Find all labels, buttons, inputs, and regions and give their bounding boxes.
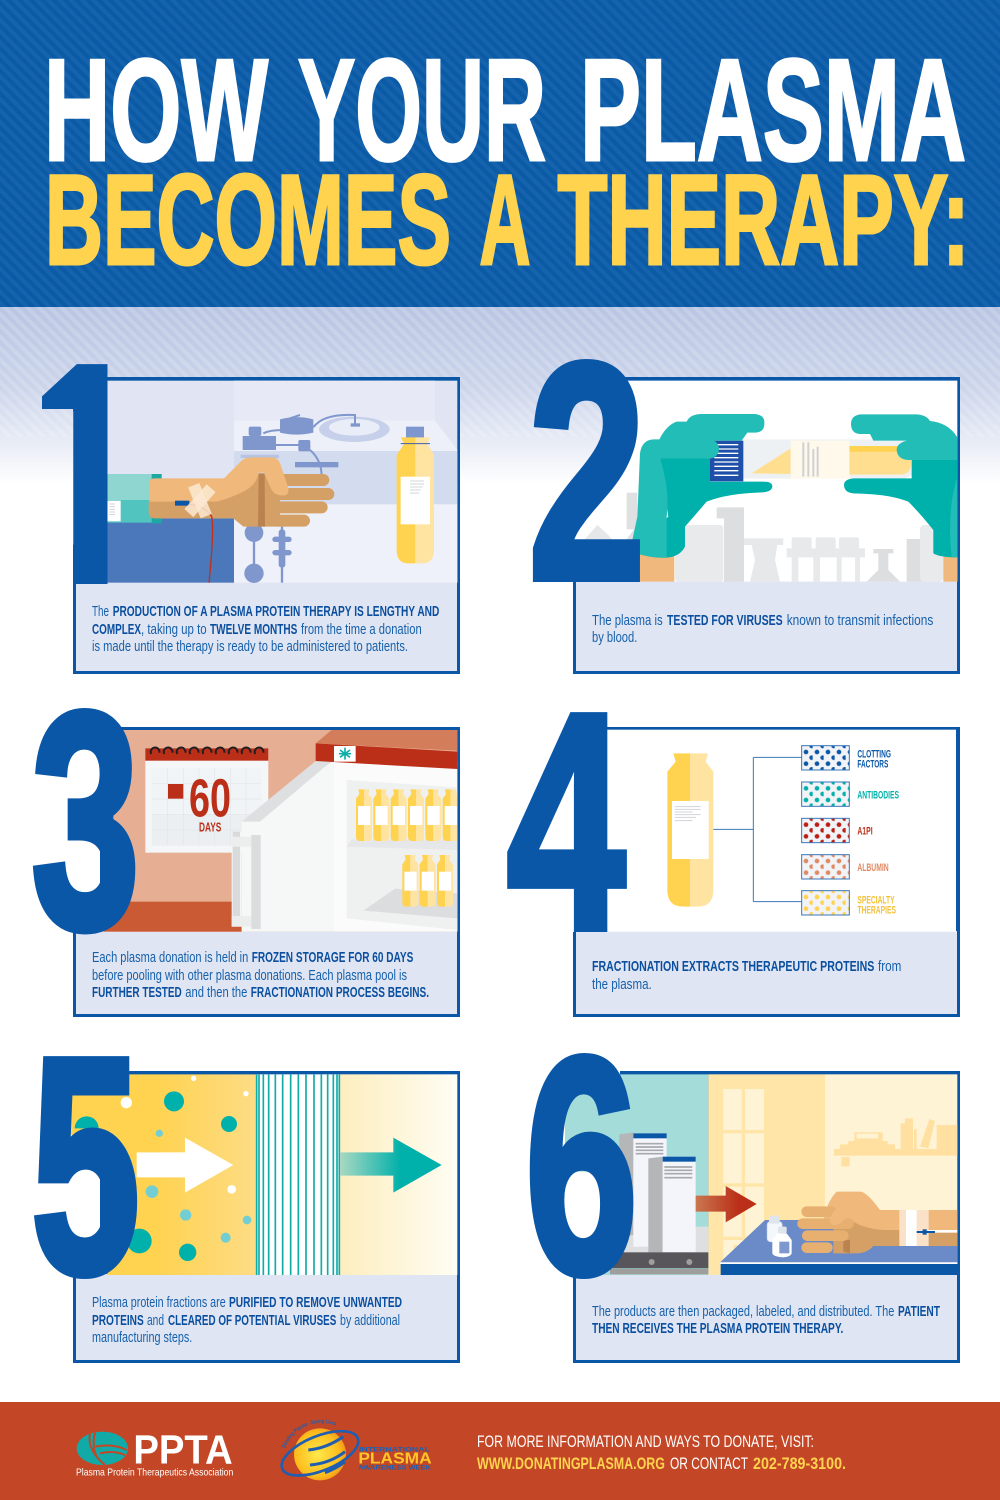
illustration: purification filter — [70, 1074, 457, 1275]
test tube — [710, 439, 916, 481]
plasma bottle — [667, 753, 713, 907]
icon: snowflake — [339, 748, 351, 760]
logo: PPTA: PPTA — [133, 1426, 233, 1472]
text: step 1: COMPLEX — [92, 621, 141, 638]
panel: step 3 — [31, 649, 460, 1017]
illustration: patient receives therapy — [565, 1074, 957, 1275]
text: step 1: The — [92, 603, 109, 620]
panel: step 6 — [525, 995, 960, 1363]
lab glassware — [577, 493, 943, 582]
plasma bottle — [397, 427, 434, 563]
footer call to action: FOR MORE INFORMATION AND WAYS TO DONATE, VISIT: — [477, 1432, 814, 1451]
header band — [0, 0, 1000, 307]
logo: PPTA — [76, 1426, 233, 1478]
swatch: clotting factors: FACTORS — [857, 758, 888, 770]
footer call to action: WWW.DONATINGPLASMA.ORG — [477, 1454, 665, 1473]
sleeve — [107, 474, 162, 523]
apheresis machine — [241, 415, 390, 583]
window — [723, 1089, 764, 1262]
swatch: antibodies: ANTIBODIES — [857, 789, 899, 801]
skin at wrists — [637, 553, 957, 582]
text: step 1: is made until the therapy is ready to be administered to patients. — [92, 638, 408, 655]
text: step 6: THEN RECEIVES THE PLASMA PROTEIN THERAPY. — [592, 1320, 843, 1337]
text: step 5: manufacturing steps. — [92, 1329, 192, 1346]
panel: step 1 — [42, 364, 460, 674]
shelf with books — [834, 1118, 957, 1166]
number 3: 3 — [31, 649, 140, 993]
logo: International Plasma Awareness Week: PLASMA — [358, 1450, 432, 1467]
number 1: 1 — [26, 302, 146, 646]
text: step 1 — [92, 603, 439, 655]
text: step 1: , taking up to — [141, 621, 207, 638]
swatch: clotting factors — [802, 746, 891, 770]
text: step 4 — [592, 958, 901, 993]
connector lines — [713, 757, 802, 902]
text: step 5: PURIFIED TO REMOVE UNWANTED — [229, 1294, 402, 1311]
panel: step 2 — [528, 299, 960, 674]
text: step 4: from — [878, 958, 901, 975]
swatch: specialty therapies: THERAPIES — [857, 905, 896, 917]
swatch: specialty therapies: SPECIALTY — [857, 895, 895, 907]
calendar: DAYS — [199, 820, 221, 835]
title: A — [480, 149, 530, 292]
swatch: specialty therapies — [802, 891, 896, 917]
icon: sun with ring: Donating Plasma · Saving Lives — [282, 1419, 336, 1448]
text: step 5 — [92, 1294, 402, 1346]
title: HOW — [44, 29, 268, 191]
calendar: 60 — [189, 769, 231, 828]
vials — [767, 1216, 792, 1257]
swatch: albumin — [802, 855, 889, 879]
text: step 2: known to transmit infections — [787, 612, 933, 629]
text: step 5: and — [147, 1312, 164, 1329]
number 4: 4 — [507, 650, 627, 994]
text: step 3: before pooling with other plasma donations. Each plasma pool is — [92, 967, 407, 984]
fist and arm — [803, 1192, 957, 1253]
icon: sun with ring — [280, 1419, 360, 1480]
text: step 3 — [92, 949, 429, 1001]
swatch: A1PI — [802, 818, 873, 843]
title — [44, 29, 970, 292]
text: step 3: FURTHER TESTED — [92, 984, 182, 1001]
text: step 2: by blood. — [592, 629, 637, 646]
right glove — [844, 414, 957, 557]
white arrow — [137, 1138, 233, 1193]
text: step 5: Plasma protein fractions are — [92, 1294, 226, 1311]
footer call to action — [477, 1432, 846, 1473]
text: step 3: FROZEN STORAGE FOR 60 DAYS — [252, 949, 413, 966]
text: step 2: TESTED FOR VIRUSES — [667, 612, 783, 629]
calendar — [145, 747, 268, 853]
panel: step 4 — [507, 650, 960, 1017]
illustration: fractionation — [600, 730, 956, 932]
text: step 1: TWELVE MONTHS — [210, 621, 297, 638]
illustration: plasma donation — [107, 381, 457, 583]
number 5: 5 — [31, 993, 140, 1338]
frozen bottles top shelf — [356, 789, 457, 841]
number 2: 2 — [528, 299, 646, 643]
text: step 1: from the time a donation — [301, 621, 422, 638]
text: step 5: PROTEINS — [92, 1312, 144, 1329]
logo: PPTA: Plasma Protein Therapeutics Association — [76, 1467, 233, 1478]
table — [720, 1220, 957, 1275]
footer call to action: 202-789-3100. — [753, 1454, 846, 1473]
teal arrow — [340, 1138, 442, 1193]
swatch: antibodies — [802, 782, 899, 806]
text: step 6: The products are then packaged, labeled, and distributed. The — [592, 1303, 894, 1320]
title: BECOMES — [45, 149, 451, 292]
logo: International Plasma Awareness Week — [280, 1419, 432, 1480]
text: step 6 — [592, 1303, 940, 1337]
left glove fingers — [630, 414, 764, 557]
text: step 3: FRACTIONATION PROCESS BEGINS. — [251, 984, 429, 1001]
left glove palm — [630, 457, 772, 558]
frozen bottles lower shelf — [402, 855, 453, 907]
swatch: albumin: ALBUMIN — [857, 862, 889, 874]
text: step 4: FRACTIONATION EXTRACTS THERAPEUTIC PROTEINS — [592, 958, 874, 975]
text: step 2: The plasma is — [592, 612, 663, 629]
text: step 5: CLEARED OF POTENTIAL VIRUSES — [168, 1312, 336, 1329]
illustration: frozen storage — [103, 730, 457, 932]
logo: International Plasma Awareness Week: INTERNATIONAL — [359, 1447, 430, 1454]
freezer — [232, 743, 457, 932]
logo: International Plasma Awareness Week: AWARENESS WEEK — [358, 1464, 431, 1471]
swatch: A1PI: A1PI — [857, 825, 873, 837]
text: step 6: PATIENT — [898, 1303, 940, 1320]
illustration: test tube — [572, 381, 957, 582]
unfiltered particles — [75, 1076, 251, 1261]
bandage and line — [175, 483, 216, 583]
text: step 3: and then the — [185, 984, 247, 1001]
text: step 5: by additional — [340, 1312, 400, 1329]
text: step 4: the plasma. — [592, 976, 652, 993]
text: step 1: PRODUCTION OF A PLASMA PROTEIN THERAPY IS LENGTHY AND — [113, 603, 439, 620]
title: YOUR — [298, 29, 546, 191]
filter — [256, 1074, 340, 1275]
number 6: 6 — [525, 995, 638, 1338]
footer band — [0, 1402, 1000, 1500]
footer call to action: OR CONTACT — [670, 1454, 748, 1473]
panel: step 5 — [31, 993, 460, 1363]
icon: PPTA globe — [77, 1432, 128, 1465]
hand and arm — [149, 457, 328, 527]
text: step 2 — [592, 612, 933, 646]
text: step 3: Each plasma donation is held in — [92, 949, 248, 966]
conveyor — [610, 1252, 708, 1274]
red arrow — [696, 1186, 757, 1222]
packaged boxes — [610, 1132, 708, 1253]
swatch: clotting factors: CLOTTING — [857, 748, 891, 760]
